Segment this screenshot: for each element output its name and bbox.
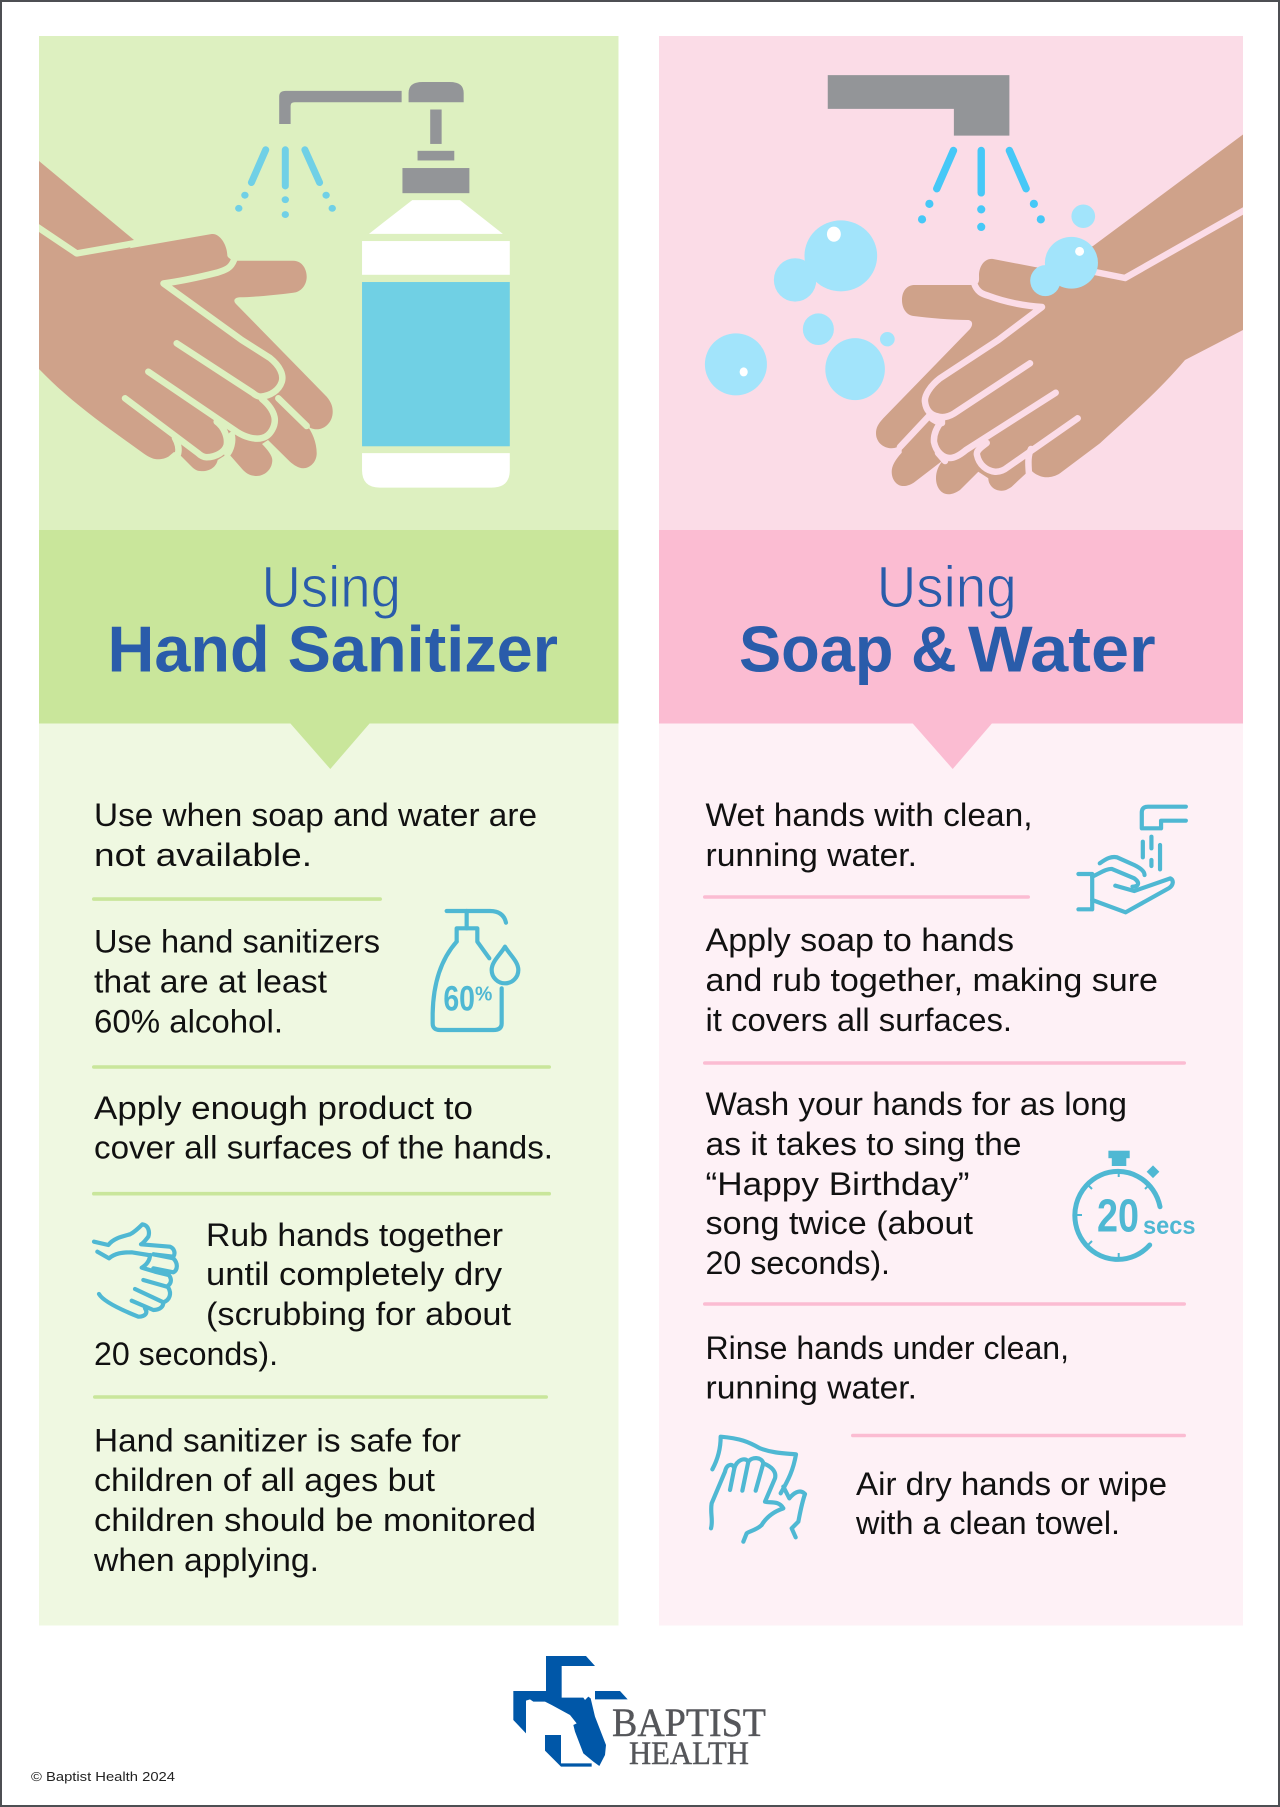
text: rub hands together: until completely dry [206, 1256, 502, 1292]
icon: 60% bottle: % [475, 983, 492, 1006]
text: when to use [94, 797, 537, 873]
text: safe for children [93, 1422, 536, 1578]
header band: using soap and water: Using [877, 555, 1017, 620]
text: 60% alcohol: 60% alcohol. [94, 1004, 283, 1040]
text: wash for twenty seconds [706, 1086, 1127, 1281]
icon: sanitizer pump and bottle [235, 82, 510, 488]
text: wash for twenty seconds: song twice (about [706, 1205, 973, 1241]
icon: 20 second stopwatch [1075, 1151, 1196, 1259]
text: wet hands: Wet hands with clean, [706, 797, 1032, 833]
icon: faucet, spray and bubbles [705, 75, 1098, 400]
text: 60% alcohol [94, 924, 380, 1040]
text: apply enough product: cover all surfaces of the hands. [94, 1130, 553, 1166]
text: safe for children: Hand sanitizer is safe for [94, 1422, 461, 1458]
text: wash for twenty seconds: “Happy Birthday” [706, 1166, 970, 1202]
text: safe for children: when applying. [93, 1542, 319, 1578]
illustration: hand under sanitizer pump [36, 161, 333, 476]
text: wash for twenty seconds: 20 seconds). [706, 1245, 890, 1281]
text: apply soap: Apply soap to hands [706, 922, 1014, 958]
text: apply soap [706, 922, 1158, 1038]
text: rub hands together: (scrubbing for about [206, 1296, 511, 1332]
icon: rubbing hands [94, 1224, 177, 1317]
text: rinse hands [706, 1330, 1069, 1406]
text: air dry hands: with a clean towel. [855, 1505, 1120, 1541]
header band: using hand sanitizer [39, 530, 618, 769]
text: when to use: not available. [94, 837, 312, 873]
header band: using hand sanitizer: Hand Sanitizer [108, 613, 558, 686]
copyright: © Baptist Health 2024 [31, 1769, 175, 1784]
logo: Baptist Health [513, 1656, 766, 1772]
panel: using soap and water [659, 36, 1250, 1626]
icon: 20 second stopwatch: 20 [1097, 1190, 1139, 1242]
illustration: hands under faucet [876, 133, 1250, 494]
text: air dry hands [855, 1466, 1167, 1541]
icon: 60% bottle: 60 [443, 980, 475, 1019]
text: rub hands together: 20 seconds). [94, 1336, 278, 1372]
header band: using soap and water: Soap & [739, 613, 957, 686]
text: apply soap: it covers all surfaces. [706, 1002, 1012, 1038]
panel: using hand sanitizer [36, 36, 618, 1626]
text: apply soap: and rub together, making sure [706, 962, 1158, 998]
icon: hand with towel [711, 1437, 805, 1542]
text: safe for children: children of all ages but [94, 1462, 435, 1498]
logo: Baptist Health: BAPTIST [612, 1700, 766, 1745]
text: wet hands: running water. [706, 837, 917, 873]
text: apply enough product: Apply enough product to [94, 1090, 473, 1126]
text: 60% alcohol: that are at least [94, 964, 327, 1000]
text: air dry hands: Air dry hands or wipe [856, 1466, 1167, 1502]
header band: using soap and water [659, 530, 1243, 769]
icon: 20 second stopwatch: secs [1143, 1212, 1196, 1240]
text: rub hands together: Rub hands together [206, 1217, 503, 1253]
header band: using hand sanitizer: Using [262, 555, 401, 620]
text: wash for twenty seconds: Wash your hands for as long [706, 1086, 1127, 1122]
text: 60% alcohol: Use hand sanitizers [94, 924, 380, 960]
icon: hand under faucet [1078, 807, 1186, 912]
text: when to use: Use when soap and water are [94, 797, 537, 833]
text: safe for children: children should be monitored [94, 1502, 536, 1538]
text: wash for twenty seconds: as it takes to sing the [706, 1126, 1022, 1162]
text: rub hands together [94, 1217, 511, 1372]
text: apply enough product [94, 1090, 553, 1166]
text: rinse hands: running water. [706, 1370, 917, 1406]
logo: Baptist Health: HEALTH [629, 1736, 749, 1772]
icon: 60% bottle [433, 911, 518, 1030]
text: rinse hands: Rinse hands under clean, [706, 1330, 1069, 1366]
text: wet hands [706, 797, 1032, 873]
header band: using soap and water: Water [968, 613, 1156, 686]
